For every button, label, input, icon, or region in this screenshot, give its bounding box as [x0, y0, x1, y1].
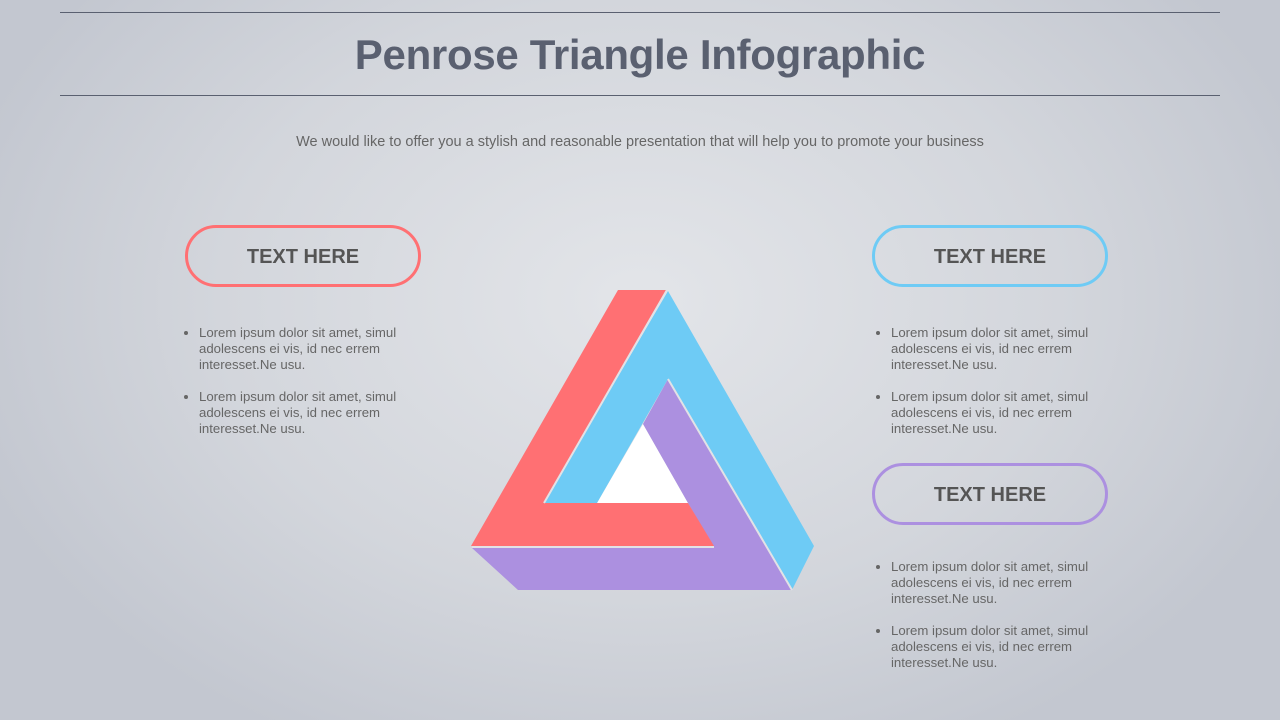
blue bar: [544, 291, 814, 590]
subtitle: We would like to offer you a stylish and reasonable presentation that will help you to promote your business: [296, 134, 984, 150]
text block: right bottom: Lorem ipsum dolor sit amet, simul adolescens ei vis, id nec errem interesset.Ne usu.: [891, 559, 1088, 606]
title: Penrose Triangle Infographic: [355, 31, 925, 78]
pill: right purple: TEXT HERE: [934, 484, 1046, 506]
text block: right top: [876, 325, 1088, 436]
text block: right bottom: [876, 559, 1088, 670]
red bar: [471, 290, 714, 546]
text block: right top: Lorem ipsum dolor sit amet, simul adolescens ei vis, id nec errem interesset.Ne usu.: [891, 325, 1088, 372]
pill: right purple: [872, 463, 1108, 525]
white center: [597, 424, 688, 503]
text block: left: [184, 325, 396, 436]
pill: left red: TEXT HERE: [247, 246, 359, 268]
text block: left: Lorem ipsum dolor sit amet, simul adolescens ei vis, id nec errem interesset.Ne usu.: [199, 325, 396, 372]
pill: right blue: TEXT HERE: [934, 246, 1046, 268]
text block: right top: Lorem ipsum dolor sit amet, simul adolescens ei vis, id nec errem interesset.Ne usu.: [891, 389, 1088, 436]
pill: right blue: [872, 225, 1108, 287]
pill: left red: [185, 225, 421, 287]
text block: left: Lorem ipsum dolor sit amet, simul adolescens ei vis, id nec errem interesset.Ne usu.: [199, 389, 396, 436]
purple bar: [472, 379, 791, 590]
text block: right bottom: Lorem ipsum dolor sit amet, simul adolescens ei vis, id nec errem interesset.Ne usu.: [891, 623, 1088, 670]
separators: [544, 290, 667, 503]
